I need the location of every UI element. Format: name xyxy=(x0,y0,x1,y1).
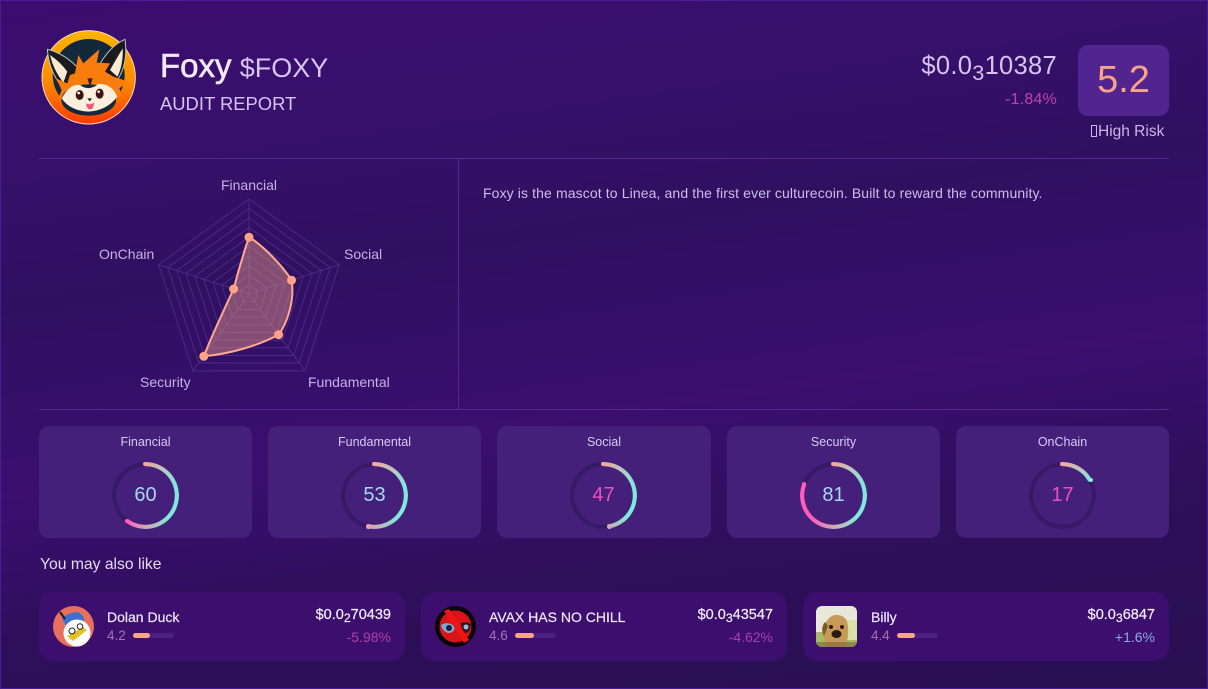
risk score box: 5.2 xyxy=(1097,59,1150,101)
radar axis labels: Financial xyxy=(221,177,277,193)
subtitle: AUDIT REPORT xyxy=(160,93,296,114)
description: Foxy is the mascot to Linea, and the first ever culturecoin. Built to reward the community. xyxy=(483,185,1043,201)
panel: Dolan Duck: -5.98% xyxy=(347,629,391,645)
panel: Billy xyxy=(803,592,1169,661)
rating bar xyxy=(133,633,174,638)
panel: OnChain score xyxy=(956,426,1169,538)
radar data points xyxy=(199,233,296,361)
panel: AVAX HAS NO CHILL: AVAX HAS NO CHILL xyxy=(489,609,625,625)
panel: OnChain score: OnChain xyxy=(1038,435,1087,449)
panel: AVAX HAS NO CHILL: -4.62% xyxy=(729,629,773,645)
panel: Billy: Billy xyxy=(871,609,897,625)
radar chart xyxy=(99,177,390,390)
title: Foxy $FOXY xyxy=(160,47,328,84)
panel: Billy: 4.4 xyxy=(871,628,890,643)
rating bar xyxy=(897,633,938,638)
price change: -1.84% xyxy=(1005,91,1057,108)
panel: Fundamental score: 53 xyxy=(363,484,386,506)
panel: AVAX HAS NO CHILL: $0.0343547 xyxy=(698,607,773,625)
panel: Billy: +1.6% xyxy=(1115,629,1155,645)
panel: Financial score: 60 xyxy=(134,484,157,506)
icon: duck avatar xyxy=(53,606,94,647)
panel: Security score: 81 xyxy=(822,484,845,506)
logo: Foxy mascot xyxy=(42,30,136,124)
panel: AVAX HAS NO CHILL: 4.6 xyxy=(489,628,508,643)
section heading: You may also like xyxy=(40,556,162,573)
panel: Social score xyxy=(497,426,711,538)
icon: puppy avatar xyxy=(816,606,857,647)
panel: Financial score: Financial xyxy=(120,435,171,449)
risk label: High Risk xyxy=(1098,123,1164,140)
panel: AVAX HAS NO CHILL xyxy=(421,592,787,661)
price: $0.0310387 xyxy=(921,52,1057,85)
icon: AVAX avatar xyxy=(435,606,476,647)
risk score box xyxy=(1078,45,1169,116)
radar axis labels: OnChain xyxy=(99,246,154,262)
radar axis labels: Security xyxy=(140,374,191,390)
radar axis labels xyxy=(99,177,390,390)
panel: Social score: 47 xyxy=(592,484,615,506)
panel: Financial score xyxy=(39,426,252,538)
panel: OnChain score: 17 xyxy=(1051,484,1074,506)
radar axis labels: Fundamental xyxy=(308,374,390,390)
panel: Social score: Social xyxy=(587,435,621,449)
panel: Dolan Duck: $0.0270439 xyxy=(316,607,391,625)
radar data shape xyxy=(204,237,292,356)
panel: Dolan Duck: 4.2 xyxy=(107,628,126,643)
panel: Security score: Security xyxy=(811,435,856,449)
panel: Fundamental score xyxy=(268,426,481,538)
radar axis labels: Social xyxy=(344,246,382,262)
rating bar xyxy=(515,633,556,638)
panel: Fundamental score: Fundamental xyxy=(338,435,411,449)
panel: Security score xyxy=(727,426,940,538)
panel: Dolan Duck: Dolan Duck xyxy=(107,609,179,625)
panel: Dolan Duck xyxy=(39,592,405,661)
panel: Billy: $0.036847 xyxy=(1088,607,1155,625)
